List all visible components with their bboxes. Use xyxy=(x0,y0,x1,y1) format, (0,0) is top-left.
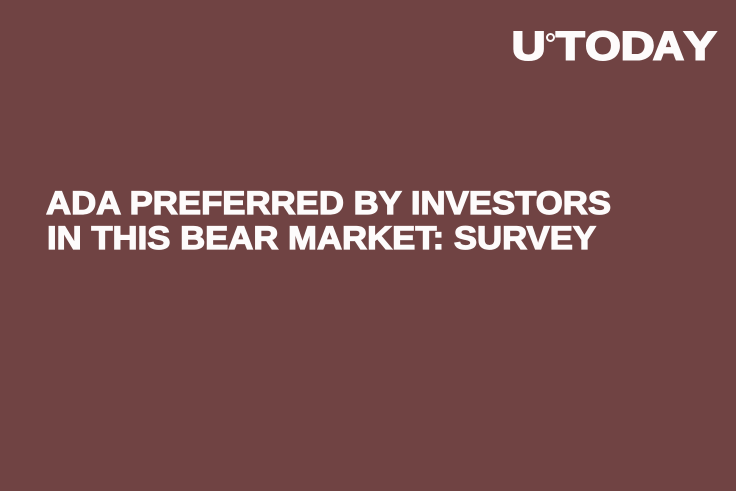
title line 1: ADA PREFERRED BY INVESTORS xyxy=(46,185,611,221)
logo degree mark xyxy=(547,34,554,41)
logo word TODAY: D xyxy=(621,25,654,69)
logo letter U: U xyxy=(512,25,545,69)
logo word TODAY: Y xyxy=(684,24,716,69)
title xyxy=(46,185,611,256)
logo word TODAY: A xyxy=(653,24,684,68)
logo word TODAY xyxy=(556,24,716,69)
title line 2: IN THIS BEAR MARKET: SURVEY xyxy=(47,220,596,256)
logo: U.Today xyxy=(512,24,716,69)
logo word TODAY: O xyxy=(585,24,621,69)
logo word TODAY: T xyxy=(556,25,585,69)
